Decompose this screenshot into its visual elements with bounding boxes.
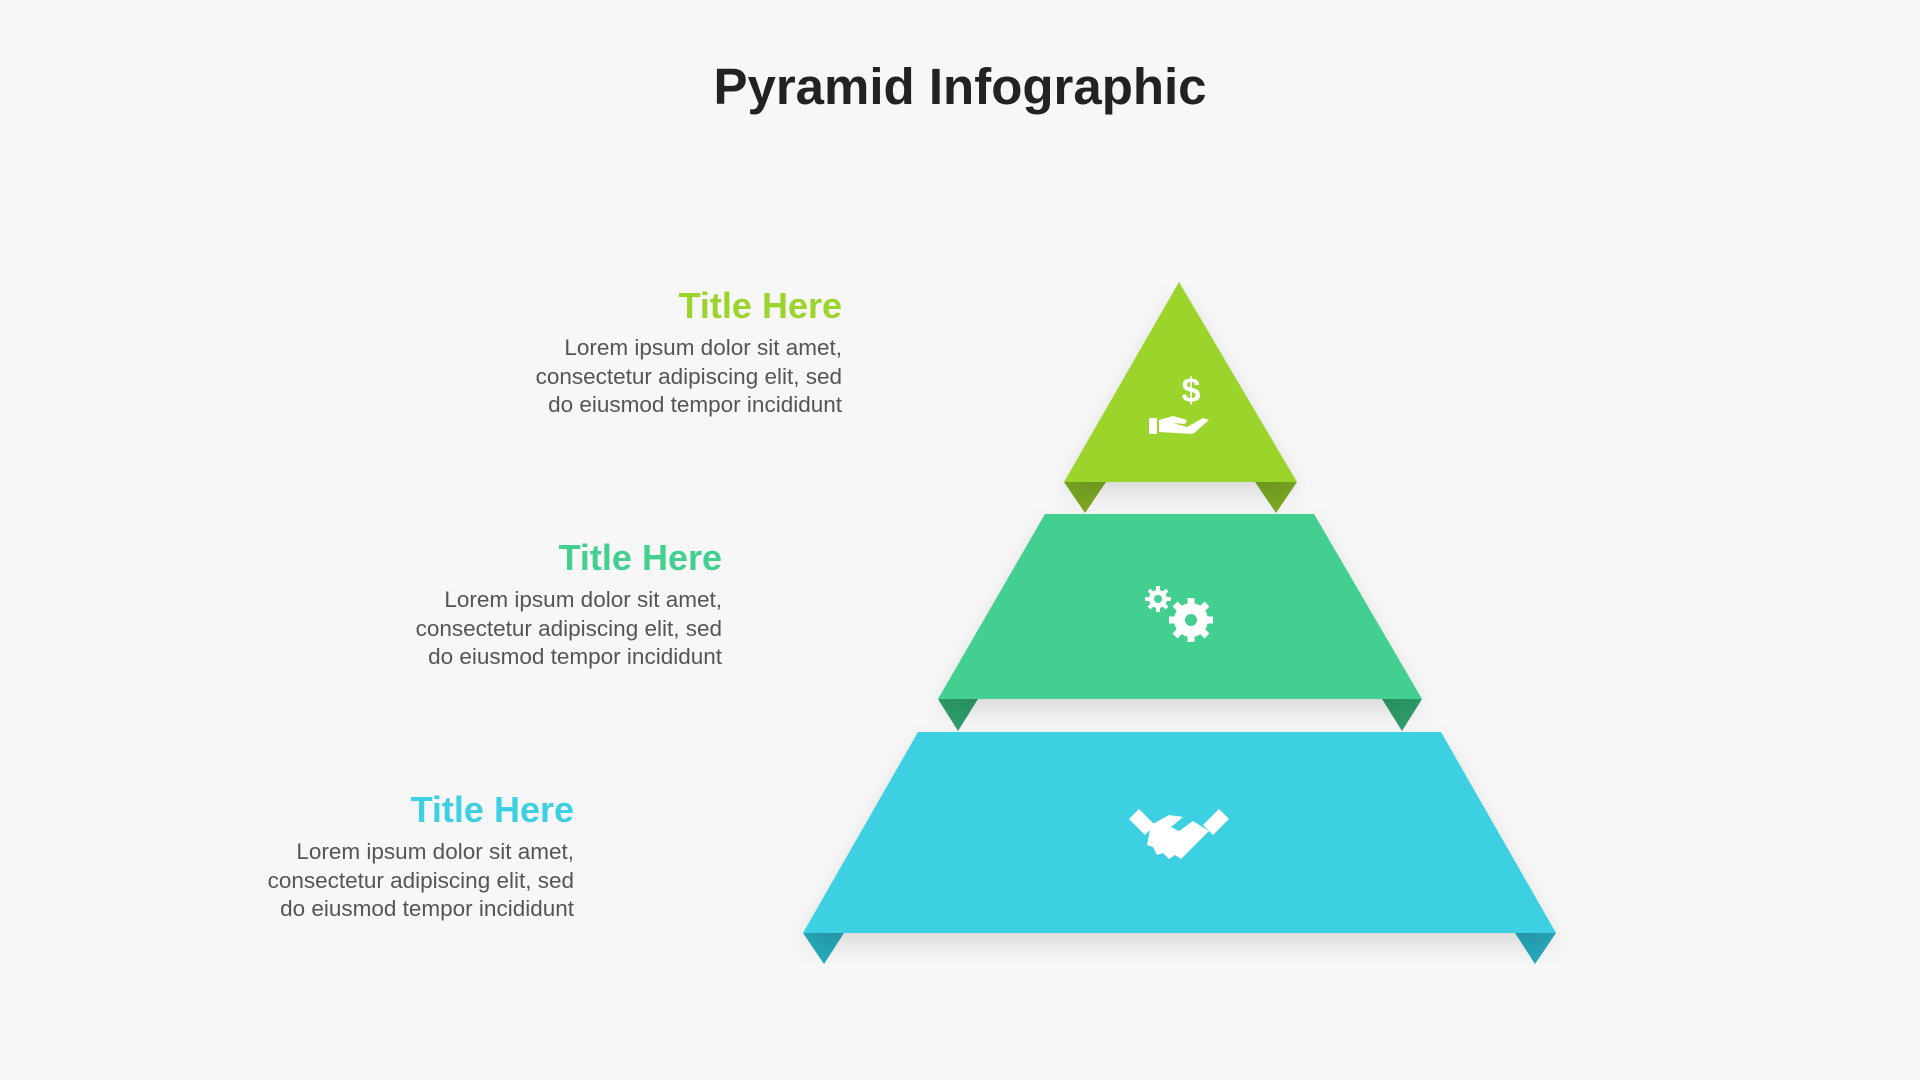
text block: level 2: Title Here	[559, 537, 722, 578]
text block: level 2: consectetur adipiscing elit, sed	[416, 616, 722, 640]
text block: level 2: Lorem ipsum dolor sit amet,	[444, 587, 722, 612]
pyramid level 2	[938, 514, 1422, 731]
icon: handshake	[1129, 809, 1229, 859]
text block: level 3: Lorem ipsum dolor sit amet,	[296, 839, 574, 864]
text block: level 3	[268, 789, 574, 921]
text block: level 1: Lorem ipsum dolor sit amet,	[564, 335, 842, 360]
text block: level 3: Title Here	[411, 789, 574, 830]
pyramid level 1	[1064, 282, 1297, 513]
text block: level 1: consectetur adipiscing elit, sed	[536, 364, 842, 388]
text block: level 3: consectetur adipiscing elit, sed	[268, 868, 574, 892]
icon: gears	[1145, 586, 1213, 642]
text block: level 2: do eiusmod tempor incididunt	[428, 644, 722, 669]
icon: dollar hand: $	[1182, 372, 1201, 410]
icon: dollar hand	[1149, 372, 1209, 434]
text block: level 1: Title Here	[679, 285, 842, 326]
text block: level 1: do eiusmod tempor incididunt	[548, 392, 842, 417]
pyramid level 3	[803, 732, 1556, 964]
title: Pyramid Infographic	[713, 58, 1207, 115]
text block: level 1	[536, 285, 842, 417]
text block: level 2	[416, 537, 722, 669]
text block: level 3: do eiusmod tempor incididunt	[280, 896, 574, 921]
